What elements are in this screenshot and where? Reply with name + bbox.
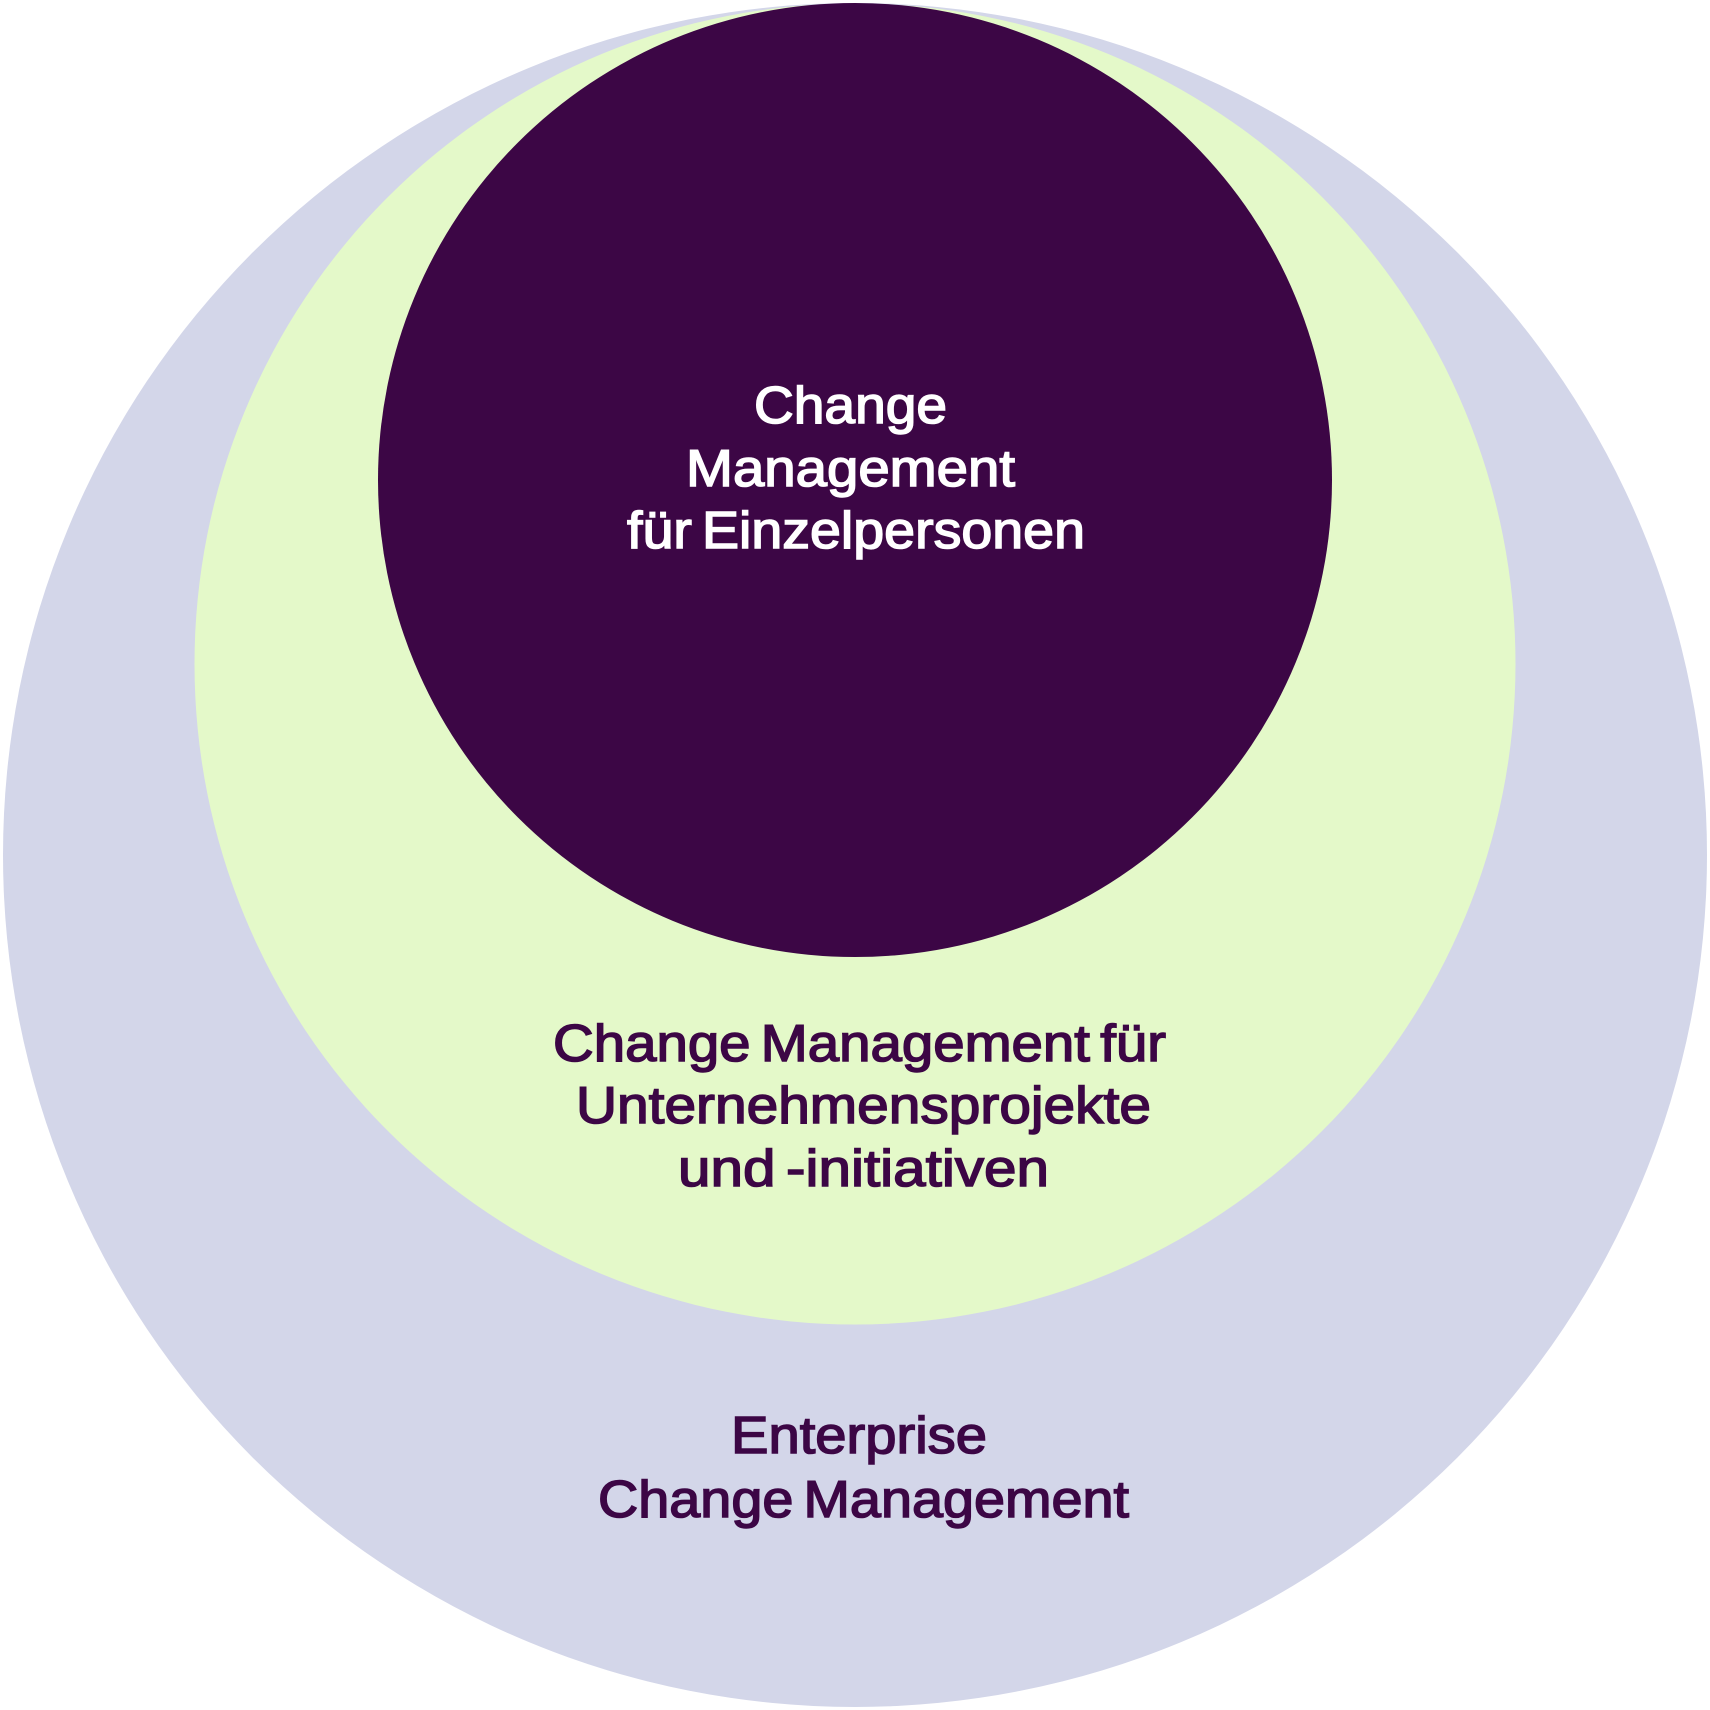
label: projects and initiatives [553,1015,1166,1198]
label: enterprise [598,1407,1130,1529]
label: enterprise: Enterprise [731,1407,987,1465]
label: enterprise: Change Management [598,1471,1130,1529]
label: individuals: für Einzelpersonen [627,502,1085,560]
label: individuals [627,377,1085,560]
label: projects and initiatives: Unternehmensprojekte [576,1077,1151,1135]
label: individuals: Management [686,440,1016,498]
label: projects and initiatives: und -initiativen [678,1140,1049,1198]
label: individuals: Change [754,377,947,435]
label: projects and initiatives: Change Management für [553,1015,1166,1073]
circle: change management for individuals [378,3,1332,957]
circle: change management for projects [194,4,1516,1324]
